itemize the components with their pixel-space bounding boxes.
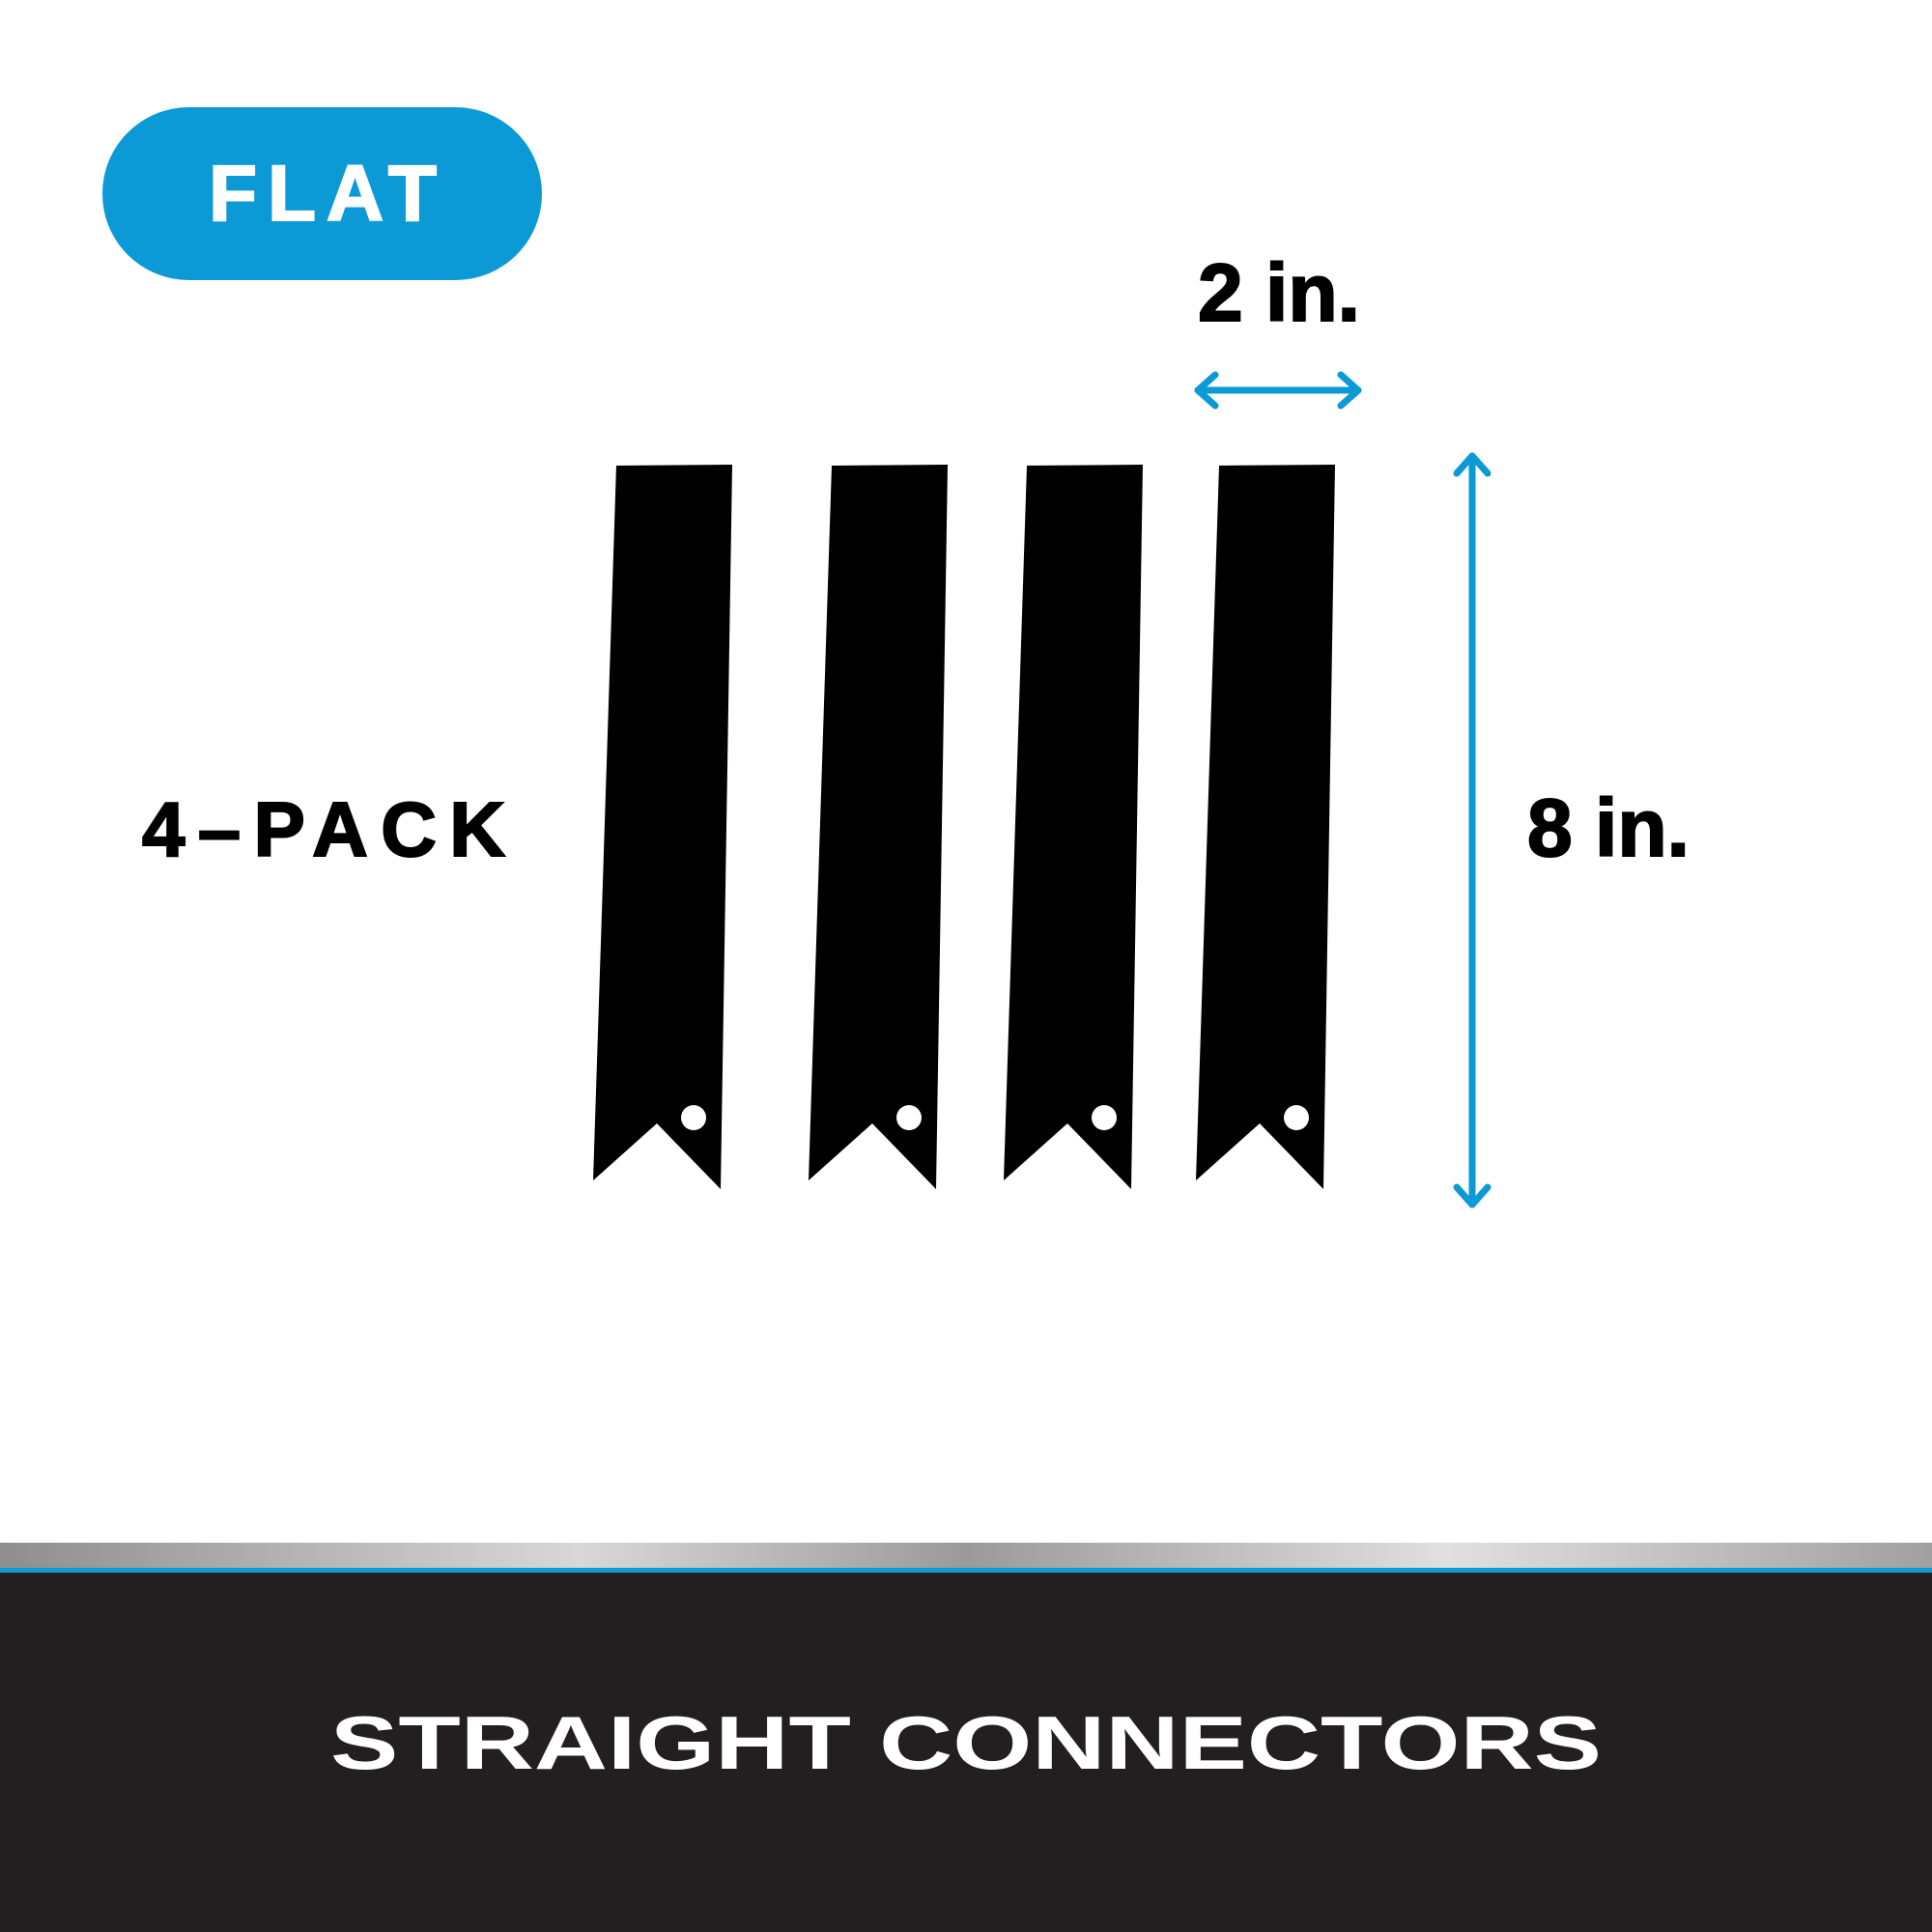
strip 3 [1004,465,1143,1189]
footer title: STRAIGHT CONNECTORS [330,1700,1602,1785]
arrow: width [1198,375,1358,406]
label: 8 in.: 8 in. [1527,782,1690,873]
badge: FLAT: FLAT [209,150,437,238]
badge: FLAT [102,107,542,280]
footer band [0,1543,1932,1932]
strip 1 [593,465,732,1189]
connector strips [593,465,1335,1189]
strip 2 [809,465,948,1189]
label: 2 in.: 2 in. [1198,247,1360,338]
strip 4 [1196,465,1335,1189]
arrow: height [1457,456,1488,1205]
label: 4-PACK: 4–PACK [142,786,505,872]
